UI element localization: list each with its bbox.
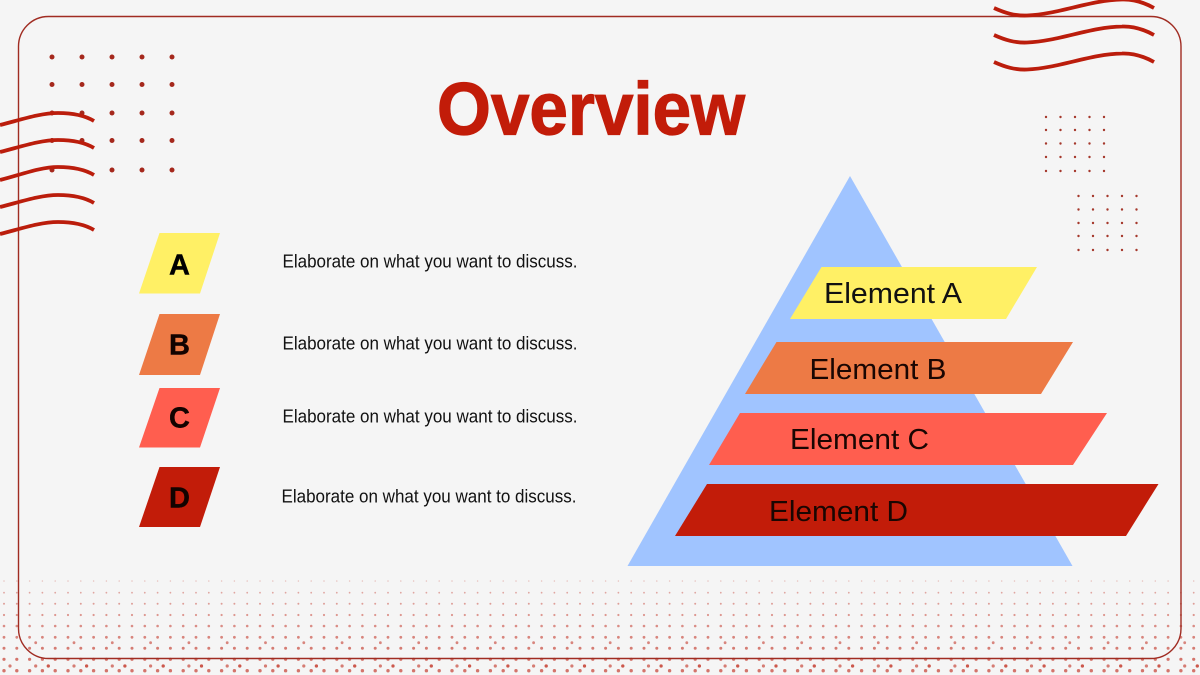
- item C badge: C: [169, 402, 190, 434]
- halftone dot band: [4, 581, 1200, 671]
- pyramid triangle: [628, 176, 1072, 566]
- tier: Element B: [745, 342, 1073, 394]
- item D text: Elaborate on what you want to discuss.: [282, 486, 576, 506]
- waves: top right: [994, 0, 1154, 70]
- tier: Element C: Element C: [790, 424, 929, 456]
- waves: left: [0, 113, 94, 234]
- title: Overview: [437, 68, 745, 150]
- item D badge: D: [169, 482, 190, 514]
- dot grid: top left: [50, 54, 174, 172]
- item C text: Elaborate on what you want to discuss.: [282, 406, 578, 426]
- item C badge: [139, 388, 220, 448]
- tier: Element C: [709, 413, 1107, 465]
- tier: Element B: Element B: [810, 354, 946, 386]
- list: discussion items: [139, 233, 578, 527]
- dot grid: right lower: [1078, 196, 1138, 250]
- tier: Element A: [790, 267, 1037, 319]
- tier: Element D: Element D: [769, 496, 908, 528]
- item B badge: B: [169, 330, 190, 362]
- item D badge: [139, 467, 220, 527]
- tier: Element D: [675, 484, 1158, 536]
- item A badge: [139, 233, 220, 294]
- item B badge: [139, 314, 220, 375]
- pyramid diagram: [628, 176, 1158, 566]
- item A text: Elaborate on what you want to discuss.: [282, 250, 578, 272]
- item A badge: A: [169, 250, 190, 282]
- item B text: Elaborate on what you want to discuss.: [282, 332, 578, 354]
- tier: Element A: Element A: [824, 278, 963, 310]
- dot grid: right upper: [1046, 117, 1106, 171]
